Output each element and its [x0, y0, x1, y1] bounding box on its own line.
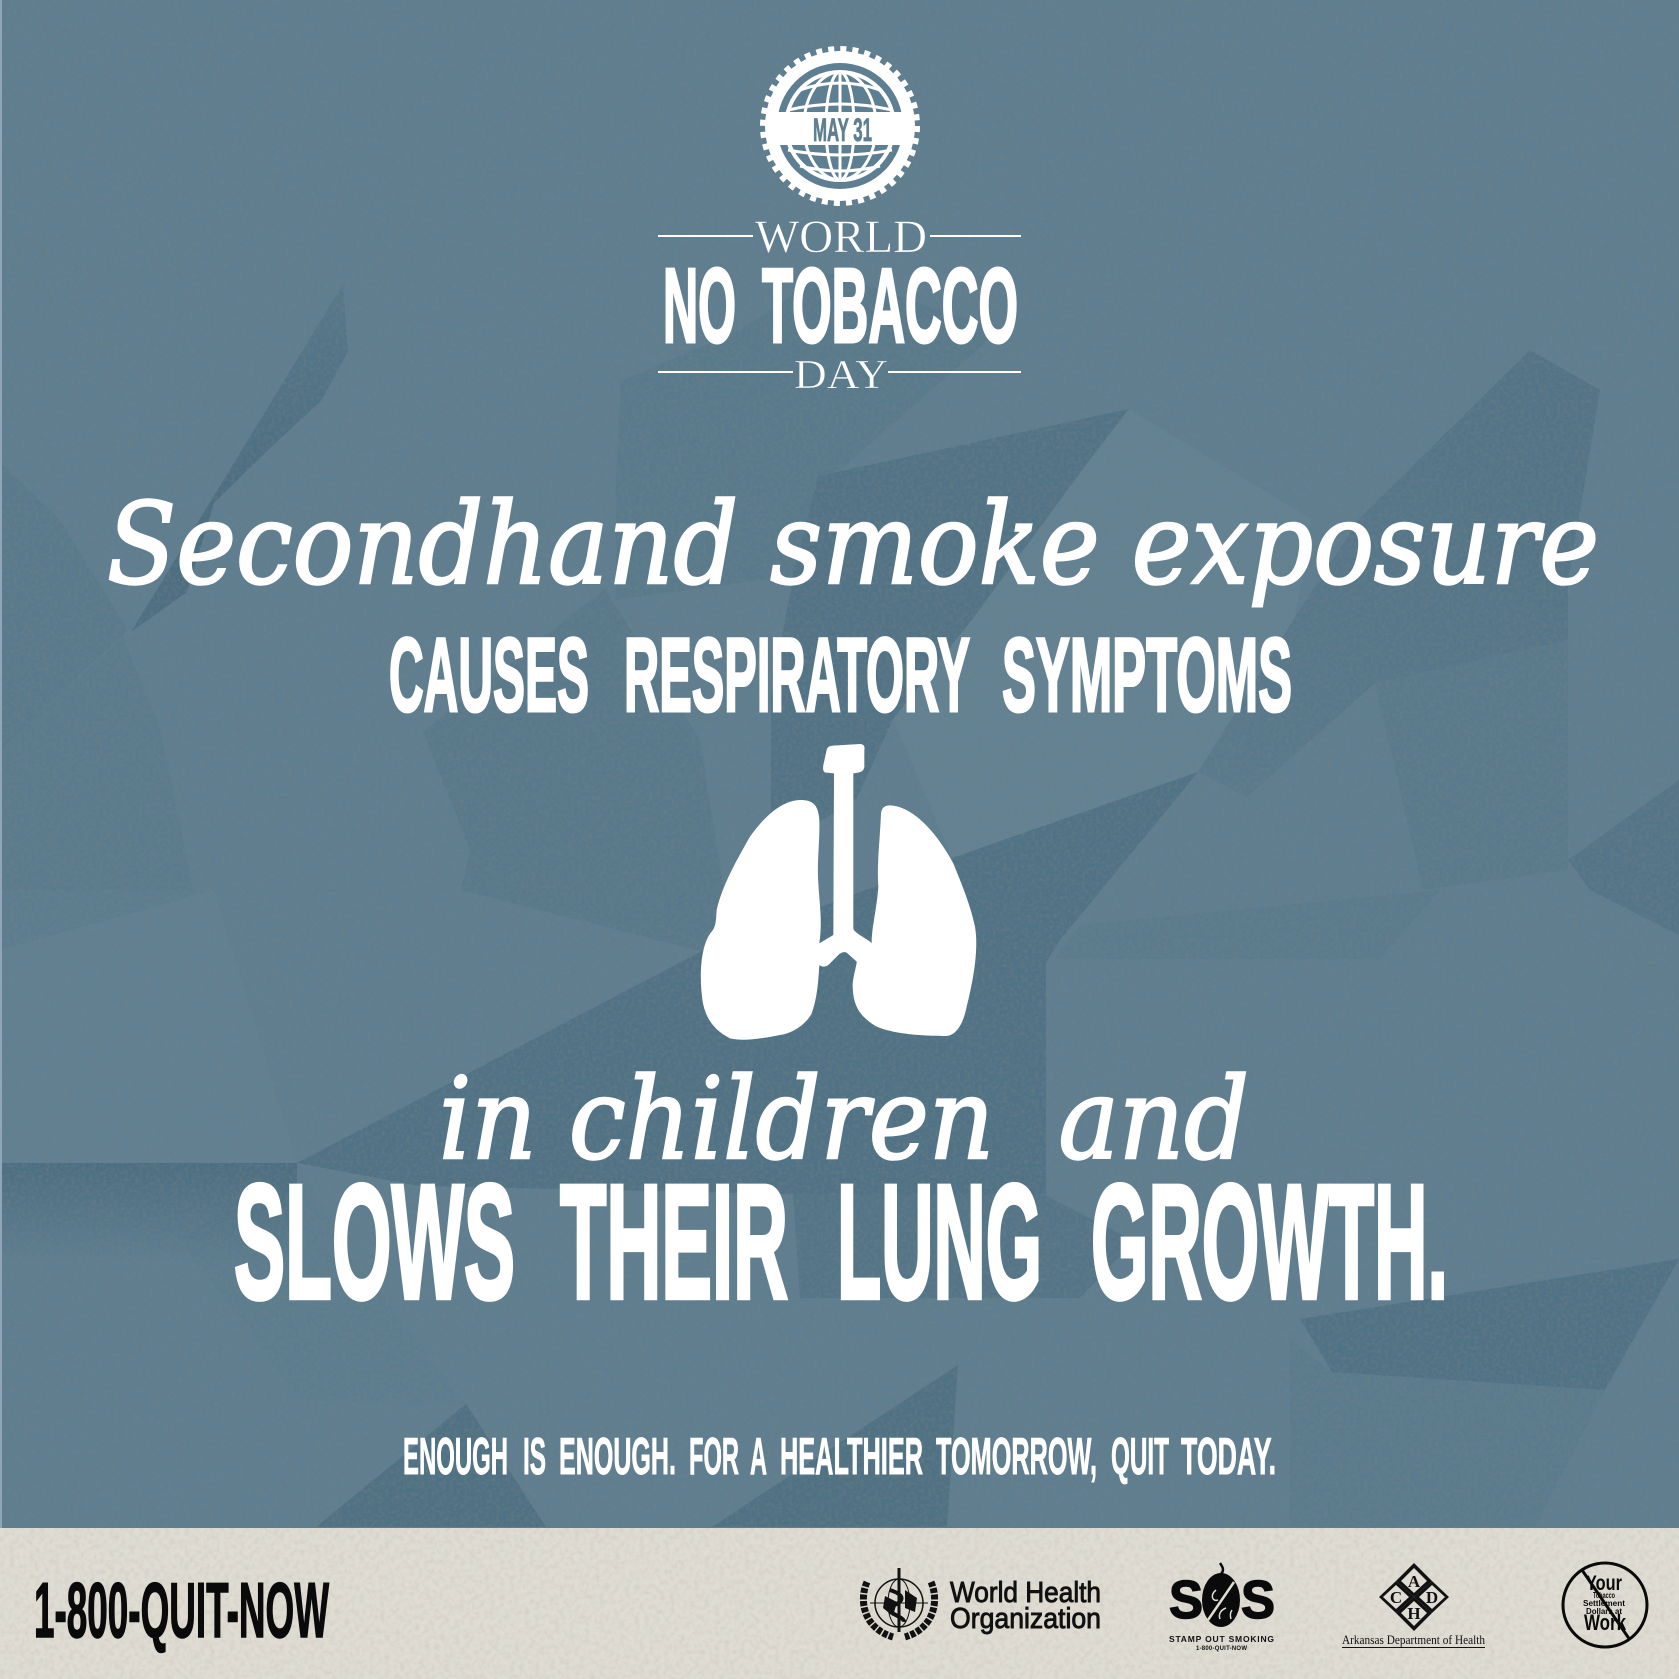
logo text: Tobacco [1593, 1591, 1615, 1600]
SOS lettering [1169, 1570, 1275, 1630]
heading: NO TOBACCO [663, 247, 1018, 365]
date band: MAY 31 [813, 112, 872, 148]
footer panel [0, 1528, 1679, 1679]
headline: slows their lung growth: LUNG [837, 1150, 1042, 1333]
headline: slows their lung growth: SLOWS [234, 1150, 515, 1333]
logo: Stamp Out Smoking [1169, 1563, 1275, 1652]
underline [1342, 1647, 1485, 1648]
heading: NO TOBACCO: NO [663, 247, 736, 365]
logo text: Dollars at [1586, 1607, 1622, 1616]
title lockup: World No Tobacco Day [658, 211, 1021, 397]
rule right of WORLD [930, 235, 1021, 237]
subheading: causes respiratory symptoms [389, 617, 1292, 734]
text: World Health Organization [950, 1577, 1101, 1635]
headline: in children and: in children and [439, 1055, 1249, 1185]
icon: globe [777, 63, 903, 189]
caption: STAMP OUT SMOKING [1169, 1634, 1274, 1644]
logo: World Health Organization [863, 1568, 1101, 1637]
logo text: Work [1584, 1610, 1627, 1635]
logo: Your Tobacco Settlement Dollars at Work [1563, 1563, 1647, 1647]
logo text: Settlement [1583, 1599, 1625, 1608]
SOS lettering: S [1169, 1570, 1203, 1630]
headline: slows their lung growth [234, 1150, 1448, 1333]
logo text: Your [1586, 1572, 1622, 1595]
icon: WHO emblem [863, 1568, 935, 1637]
icon: ADH diamond: A [1408, 1572, 1421, 1591]
tagline: TOMORROW, [936, 1428, 1097, 1486]
logo: Arkansas Department of Health [1342, 1563, 1486, 1648]
icon: ADH diamond [1379, 1563, 1449, 1631]
badge: May 31 globe seal [763, 49, 917, 203]
tagline: ENOUGH [403, 1428, 508, 1486]
logo text [1583, 1572, 1627, 1635]
badge gear body [763, 49, 917, 203]
icon: ADH diamond: C [1390, 1588, 1402, 1607]
icon: pumpkin O [1202, 1563, 1240, 1627]
text: TOBACCO [762, 247, 1018, 365]
icon: ADH diamond: D [1426, 1588, 1438, 1607]
caption [1169, 1634, 1274, 1652]
text: 1-800-QUIT-NOW [34, 1566, 329, 1654]
caption: Arkansas Department of Health [1342, 1633, 1486, 1647]
subheading: causes respiratory symptoms: CAUSES [389, 617, 589, 734]
caption: 1-800-QUIT-NOW [1196, 1646, 1247, 1652]
text: World Health Organization: Organization [950, 1603, 1101, 1635]
tagline: A [750, 1428, 767, 1486]
tagline: ENOUGH. [559, 1428, 676, 1486]
icon: lungs [701, 744, 976, 1040]
tagline: TODAY. [1181, 1428, 1276, 1486]
tagline: QUIT [1111, 1428, 1169, 1486]
heading: WORLD: WORLD [755, 211, 927, 263]
icon: ADH diamond: H [1407, 1604, 1421, 1623]
tagline: FOR [689, 1428, 739, 1486]
tagline [403, 1428, 1276, 1486]
text: World Health Organization: World Health [950, 1577, 1101, 1609]
date band [775, 112, 905, 148]
tagline: HEALTHIER [780, 1428, 923, 1486]
SOS lettering: S [1241, 1570, 1275, 1630]
subheading: causes respiratory symptoms: RESPIRATORY [624, 617, 970, 734]
circle and slash [1563, 1563, 1647, 1647]
tagline: IS [523, 1428, 546, 1486]
rule left of WORLD [658, 235, 753, 237]
rule left of DAY [658, 371, 793, 373]
headline: slows their lung growth: THEIR [560, 1150, 788, 1333]
text: SYMPTOMS [1002, 617, 1292, 734]
heading: DAY: DAY [794, 351, 888, 397]
rule right of DAY [888, 371, 1021, 373]
